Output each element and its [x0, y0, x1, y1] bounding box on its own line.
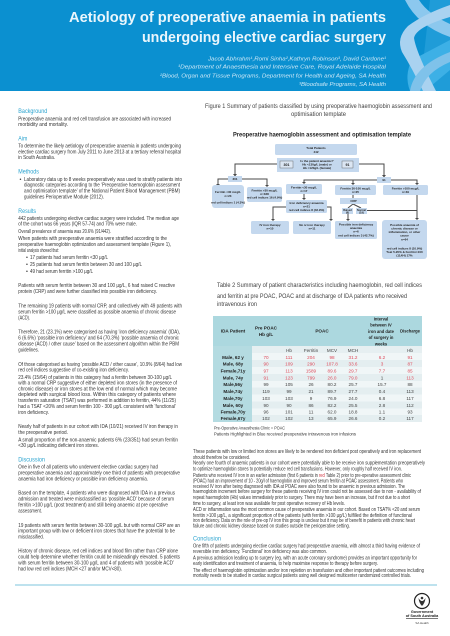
conclusion section — [193, 536, 424, 579]
table rows in dark text: Female,67y — [221, 416, 246, 421]
table header: POAC — [315, 328, 329, 334]
results section: Results — [18, 208, 36, 215]
box: possible iron deficiency — [335, 221, 377, 239]
results section: Therefore, 21 (23.1%) were categorised as having ‘iron deficiency anaemia’ (IDA), — [18, 330, 180, 336]
results section: 23.4% (15/64) of patients in this category had a ferritin between 30-100 µg/L — [18, 375, 172, 381]
table 2 caption: and ferritin at pre POAC, POAC and at discharge of IDA patients who received — [217, 293, 407, 300]
header banner — [0, 0, 450, 91]
aim section: elective cardiac surgery from July 2011 to June 2013 at a tertiary referral hospital — [18, 150, 181, 156]
table rows in dark text: 82.2 — [328, 403, 337, 408]
anaemia question box: Hb <120g/L (female) — [303, 166, 331, 170]
anaemia question box: 91 — [346, 163, 350, 167]
box: ferritin 30-100: Ferritin 30-100 mcg/L — [340, 186, 371, 190]
table 2: IDA patients — [213, 316, 422, 422]
box: normal CRP: Normal — [357, 208, 366, 212]
table rows in dark text: 2.8 — [379, 403, 386, 408]
box: ferritin under 30, non-anaemic: Ferritin <30 mcg/L — [215, 190, 241, 194]
table rows in dark text: 0.2 — [379, 416, 386, 421]
title: undergoing elective cardiac surgery — [142, 29, 387, 46]
results section: A small proportion of the non-anaemic patients 6% (23/351) had serum ferritin — [18, 438, 178, 444]
discussion section: Based on the template, 4 patients who were diagnosed with IDA in a previous — [18, 490, 175, 496]
logo: Government of South Australia: Government — [411, 610, 434, 614]
box: IV iron therapy: n=10 — [267, 226, 274, 230]
box: possible anaemia of chronic disease: n=64 — [401, 238, 408, 242]
discussion section: assessment. — [18, 508, 42, 514]
table rows highlighted in red: 91 — [263, 376, 269, 380]
results section: 17 patients had serum ferritin <30 µg/L — [30, 255, 108, 261]
table 2 caption — [217, 282, 422, 308]
table rows in dark text: 90 — [286, 403, 292, 408]
non-anaemic node: 301: 301 — [232, 177, 238, 181]
table rows highlighted in red: 26.0 — [328, 376, 337, 380]
table rows in dark text — [221, 382, 414, 421]
table header: IDA Patient — [221, 328, 246, 334]
box: possible anaemia of chronic disease: Possible anaemia of — [390, 223, 419, 227]
box: possible anaemia of chronic disease — [382, 220, 427, 259]
table rows in dark text: 21 — [308, 389, 314, 394]
table rows in dark text: 26.6 — [349, 416, 358, 421]
table rows highlighted in red: Male, 62 y — [222, 355, 244, 360]
right text column: discussion continued: time to surgery, at least iron was available for post operative recovery of Hb levels. — [193, 501, 345, 507]
background section: morbidity and mortality. — [18, 122, 68, 128]
box: iron deficiency anaemia: red cell indices 8 (42.9%) — [289, 208, 324, 212]
aim section: Aim — [18, 136, 27, 143]
table rows highlighted in red: Male, 74y — [223, 376, 244, 380]
background section: Background — [18, 108, 48, 115]
table rows in dark text: 86 — [308, 403, 314, 408]
background section — [18, 108, 171, 128]
box: raised CRP: Raised — [343, 208, 352, 212]
box: raised CRP: (6) — [346, 210, 349, 214]
table rows in dark text: Male,70y — [223, 396, 243, 401]
box: no iron therapy: No iv iron therapy — [299, 223, 325, 227]
results section: 6 (6.6%) ‘possible iron deficiency’ and 64 (70.3%) ‘possible anaemia of chronic — [18, 336, 179, 342]
box: ferritin over 30, non-anaemic — [247, 187, 282, 202]
table header: weeks — [374, 341, 388, 346]
box: possible iron deficiency: anaemia — [350, 226, 362, 230]
box: possible anaemia of chronic disease: cause — [400, 234, 409, 238]
box: iron deficiency anaemia: Iron deficiency anaemia — [289, 201, 324, 205]
methods section: Methods — [18, 169, 39, 176]
box: iron deficiency anaemia — [286, 200, 327, 213]
figure 1 caption: optimisation template — [291, 111, 347, 118]
results section: initial analysis showed that: — [18, 248, 59, 254]
table header: Pre POAC — [255, 326, 278, 330]
right text column: discussion continued: failure and chronic kidney disease based on studies outside the perioperative setting. — [193, 524, 350, 530]
table rows highlighted in red: Male, 68y — [223, 362, 244, 366]
results section: 442 patients undergoing elective cardiac surgery were included. The median age — [18, 216, 179, 222]
box: ferritin 30-100: n=25 — [352, 190, 359, 194]
table rows highlighted in red: 70 — [263, 355, 269, 360]
table rows in dark text: 15.7 — [378, 382, 387, 387]
conclusion section: reversible iron deficiency. ‘Functional’ iron deficiency was also common. — [193, 549, 327, 555]
box: ferritin over 100: Ferritin >100 mcg/L — [392, 186, 419, 190]
total patients box — [275, 144, 357, 155]
table rows in dark text: 24.0 — [349, 396, 358, 401]
table rows in dark text: 76.9 — [328, 396, 337, 401]
discussion section: preoperative anaemia and approximately one third of patients with preoperative — [18, 470, 180, 476]
results section: • — [26, 255, 28, 261]
authors and affiliations: ³Bloodsafe Programs, SA Health — [299, 82, 386, 88]
table rows highlighted in red: 113 — [285, 368, 293, 374]
box: ferritin under 30, anaemic — [286, 184, 322, 194]
table rows in dark text: 119 — [262, 389, 270, 394]
anaemic node: 91 — [377, 177, 391, 183]
discussion section: admission and treated were misclassified as ‘possible ACD’ because of serum — [18, 496, 174, 502]
background section: Preoperative anaemia and red cell transfusion are associated with increased — [18, 116, 171, 122]
box: ferritin under 30, non-anaemic: n=23 — [225, 194, 232, 198]
table rows highlighted in red — [221, 355, 414, 380]
table rows in dark text: 93 — [407, 410, 413, 414]
table rows highlighted in red: 113 — [406, 376, 414, 380]
total patients box: 442 — [313, 150, 319, 154]
box: no iron therapy: n=11 — [309, 226, 316, 230]
aim section: in South Australia. — [18, 155, 55, 161]
table rows in dark text: 9 — [310, 396, 313, 401]
results section: serum ferritin >100 µg/L were classified as possible anaemia of chronic disease — [18, 310, 176, 316]
aim section: To determine the likely aetiology of preoperative anaemia in patients undergoing — [18, 144, 181, 150]
box: ferritin under 30, anaemic: n=17 — [301, 189, 308, 193]
table header: Ferritin — [304, 348, 319, 353]
results section: chronic disease) or iron stores at the low end of normal which may become — [18, 386, 177, 392]
arrowheads — [216, 174, 419, 221]
methods section: Laboratory data up to 8 weeks preoperatively was used to stratify patients into — [24, 177, 182, 183]
table rows highlighted in red: 123 — [285, 376, 293, 380]
table rows in dark text: 65.9 — [328, 416, 337, 421]
box: raised CRP — [342, 208, 353, 214]
table header: Discharge — [400, 328, 421, 334]
table rows in dark text: 103 — [285, 396, 293, 401]
figure 1 caption — [205, 103, 432, 118]
results section: When patients with preoperative anaemia were stratified according to the — [18, 236, 167, 242]
icon: state crest — [414, 594, 430, 608]
box: possible anaemia of chronic disease: Tsat 5-20% & Ferritin>100 — [386, 250, 423, 254]
table rows in dark text: 1.1 — [379, 410, 386, 414]
anaemia question box: 301 — [284, 163, 290, 167]
results section: 25 patients had serum ferritin between 30 and 100 µg/L — [30, 262, 142, 268]
table rows highlighted in red: 98 — [329, 355, 335, 360]
flowchart title: Preoperative haemoglobin assessment and optimisation template — [233, 131, 412, 138]
table rows in dark text: 88 — [407, 382, 413, 387]
right text column: discussion continued: Patients who received IV iron in an earlier admission (first 6 patients in red Table 2) prior to pre-operative assessment clinic — [193, 473, 411, 479]
table rows in dark text: 113 — [406, 389, 414, 394]
box: IV iron therapy: IV iron therapy — [259, 223, 281, 227]
table rows in dark text: 112 — [406, 403, 414, 408]
table rows highlighted in red: 33.6 — [349, 362, 358, 366]
box: possible anaemia of chronic disease: chronic disease or — [391, 226, 419, 230]
table notes: Pre-Operative Anaesthesia Clinic = POAC — [214, 426, 286, 431]
table header: iron and date — [368, 329, 395, 334]
results section: had a TSAT <20% and serum ferritin 100 - 300 µg/L consistent with ‘functional’ — [18, 404, 176, 410]
anaemia question box — [277, 158, 359, 172]
table rows in dark text: 101 — [285, 410, 293, 414]
box: possible anaemia of chronic disease: red cell indices 8 (10.9%) — [387, 246, 422, 250]
table rows in dark text: 99 — [263, 382, 269, 387]
results section: • — [26, 269, 28, 275]
table rows highlighted in red: 111 — [286, 355, 293, 360]
table rows in dark text: 89.7 — [328, 389, 337, 394]
non-anaemic node: 301 — [228, 176, 242, 182]
title: Aetiology of preoperative anaemia in patients — [69, 9, 386, 26]
results section: Overall prevalence of anaemia was 20.6% (91/442). — [18, 229, 111, 235]
discussion section: Discussion — [18, 457, 45, 464]
table rows in dark text: Male, 60y — [223, 403, 244, 408]
discussion section: with serum ferritin between 30-100 µg/L and 4 of patients with ‘possible ACD’ — [17, 560, 174, 566]
box: no iron therapy — [293, 221, 331, 234]
authors and affiliations: ¹Department of Anaesthesia and Intensive Care, Royal Adelaide Hospital — [178, 65, 387, 71]
table rows in dark text: Female,70y — [221, 410, 246, 414]
discussion section — [17, 457, 180, 572]
table rows in dark text: 27.7 — [349, 389, 358, 394]
table header: of surgery in — [369, 335, 394, 340]
results section: Of those categorised as having ‘possible ACD / other cause’, 10.9% (8/64) had low — [18, 362, 182, 368]
results section: Nearly half of patients in our cohort with IDA (10/21) received IV iron therapy in — [18, 424, 178, 430]
anaemia question box: Hb <130g/L (male) or — [302, 162, 333, 166]
table header: between IV — [370, 323, 392, 328]
results section: of the cohort was 66 years (IQR 57-74) and 70% were male. — [18, 222, 137, 228]
box: ferritin over 30, non-anaemic: red cell indices 16 (4.9%) — [247, 196, 282, 200]
results section: iron deficiency. — [18, 410, 49, 416]
table rows highlighted in red: 97 — [263, 368, 269, 374]
table rows highlighted in red: 107.8 — [326, 362, 338, 366]
box: possible iron deficiency: Possible iron deficiency — [339, 222, 373, 226]
discussion section: had low red cell indices (MCH <27 and/or MCV<80). — [18, 566, 122, 572]
results section: (ACD). — [18, 316, 30, 322]
table rows highlighted in red: 79.0 — [349, 376, 358, 380]
table header: Hb g/L — [259, 332, 273, 337]
results section — [17, 208, 182, 449]
box: CRP: CRP — [350, 199, 357, 203]
methods section: • — [20, 177, 22, 183]
results section: red cell indices suggestive of co-existing iron deficiency. — [18, 368, 129, 374]
table rows in dark text: 102 — [285, 416, 293, 421]
table header: Hb — [286, 348, 292, 353]
table rows in dark text: Male,74y — [223, 389, 243, 394]
table rows in dark text: 25.5 — [349, 403, 358, 408]
flowchart: preoperative haemoglobin assessment — [211, 131, 428, 259]
table rows in dark text: 102 — [262, 416, 270, 421]
table rows highlighted in red: 91 — [407, 355, 413, 360]
results section: <30 µg/L indicating deficient iron stores. — [18, 443, 99, 449]
methods section — [18, 169, 182, 200]
title — [69, 9, 387, 46]
discussion section: anaemia had iron deficiency or possible iron deficiency anaemia. — [18, 476, 148, 482]
methods section: diagnostic categories according to the ‘Preoperative haemoglobin assessment — [24, 182, 180, 188]
table rows in dark text: Male,56y — [223, 382, 243, 387]
table rows in dark text: 105 — [285, 382, 293, 387]
table 2 caption: Table 2 Summary of patient characteristics including haemoglobin, red cell indices — [217, 282, 422, 289]
results section: The remaining 19 patients with normal CRP, and collectively with 49 patients with — [18, 304, 182, 310]
discussion section: ferritin >100 µg/L (post treatment) and still being anaemic at pre operative — [18, 502, 168, 508]
table notes — [214, 426, 357, 437]
table rows in dark text: 117 — [406, 416, 414, 421]
table header — [221, 316, 421, 353]
table rows highlighted in red: 90 — [263, 362, 269, 366]
table rows in dark text: 25.7 — [349, 382, 358, 387]
conclusion section: Conclusion — [193, 536, 221, 543]
table rows in dark text: 6.8 — [379, 396, 386, 401]
table rows in dark text: 0.4 — [379, 389, 386, 394]
methods section: and optimisation template’ of the National Patient Blood Management (PBM) — [24, 188, 180, 194]
discussion section: could help determine whether ferritin could be misleadingly elevated. 5 patients — [18, 554, 180, 560]
table rows in dark text: 18.8 — [349, 410, 358, 414]
results section: protein (CRP) and were further classified into possible iron deficiency. — [18, 289, 157, 295]
box: possible anaemia of chronic disease: inflammation, or other — [389, 230, 421, 234]
aim section — [18, 136, 181, 161]
logo: Government of South Australia — [406, 594, 439, 625]
table rows in dark text: 26 — [308, 382, 314, 387]
results section: with a normal CRP suggestive of either depleted iron stores (in the presence of — [17, 380, 177, 386]
discussion section: important group with low or deficient iron stores that have the potential to be — [18, 528, 175, 534]
box: ferritin under 30, non-anaemic — [211, 185, 245, 208]
table rows in dark text: 90 — [263, 403, 269, 408]
box: normal CRP — [356, 208, 367, 214]
box: normal CRP: (19) — [359, 210, 364, 214]
box: ferritin 30-100 — [335, 185, 376, 195]
table rows highlighted in red: 31.2 — [349, 355, 358, 360]
box: ferritin over 30, non-anaemic: n=328 — [260, 192, 269, 196]
discussion section: History of chronic disease, red cell indices and blood film rather than CRP alone — [18, 548, 178, 554]
table header: Interval — [374, 316, 388, 322]
logo: Government of South Australia: SA Health — [415, 621, 429, 625]
results section: transferrin saturation (TSAT) was performed in addition to ferritin, 44% (11/25) — [18, 398, 176, 404]
table header: MCV — [327, 348, 338, 353]
right text column: discussion continued: should therefore be considered. — [193, 455, 250, 461]
box: ferritin under 30, anaemic: Ferritin <30 mcg/L — [291, 186, 317, 190]
methods section: guidelines Perioperative Module (2012). — [24, 194, 104, 200]
table rows highlighted in red: Female,71y — [221, 368, 246, 374]
box: iron deficiency anaemia: n=21 — [303, 204, 310, 208]
table rows highlighted in red: 85 — [407, 368, 413, 374]
table notes: Patients Highlighted in Blue received preoperative intravenous iron infusions — [214, 432, 357, 437]
table rows highlighted in red: 290 — [307, 362, 315, 366]
discussion section: 19 patients with serum ferritin between 30-100 µg/L but with normal CRP are an — [18, 523, 180, 529]
table rows in dark text: 80.2 — [328, 382, 337, 387]
table rows highlighted in red: 29.7 — [349, 368, 358, 374]
table rows in dark text: 11 — [309, 410, 314, 414]
table 2 caption: intravenous iron — [217, 301, 258, 308]
left text column — [17, 108, 182, 572]
table rows highlighted in red: 204 — [307, 355, 315, 360]
results section: preoperative haemoglobin optimization and assessment template (Figure 1), — [18, 242, 171, 248]
discussion section: One in five of all patients who underwent elective cardiac surgery had — [18, 464, 158, 470]
anaemic node: 91: 91 — [382, 178, 386, 182]
table rows highlighted in red: 1589 — [306, 368, 317, 374]
table rows in dark text: 62.0 — [328, 410, 337, 414]
results section: 49 had serum ferritin >100 µg/L — [30, 269, 93, 275]
results section: • — [26, 262, 28, 268]
right text column: discussion continued — [193, 449, 425, 530]
results section: depleted with surgical blood loss. Within this category of patients where — [18, 392, 176, 398]
table header: MCH — [348, 348, 358, 353]
box: possible iron deficiency: n=6 — [353, 230, 359, 234]
total patients box: Total Patients — [306, 146, 326, 150]
table rows highlighted in red: 89.6 — [328, 368, 337, 374]
box: ferritin over 30, non-anaemic: Ferritin >30 mcg/L — [252, 188, 278, 192]
table rows highlighted in red: 87 — [407, 362, 413, 366]
box: possible iron deficiency: red cell indices 3 (42.7%) — [338, 234, 374, 238]
logo: Government of South Australia: of South Australia — [406, 614, 439, 618]
results section: guidelines. — [18, 348, 39, 354]
results section: disease (ACD) / other cause’ based on the assessment algorithm within the PBM — [18, 342, 179, 348]
table rows in dark text: 103 — [262, 396, 270, 401]
box: CRP — [340, 198, 367, 204]
box: ferritin over 100: n=49 — [402, 190, 409, 194]
discussion section: misclassified. — [18, 534, 44, 540]
table rows highlighted in red: 799 — [307, 376, 315, 380]
authors and affiliations: Jacob Abhrahm¹,Romi Sinha²,Kathryn Robinson³, David Cardone¹ — [207, 57, 386, 63]
table rows in dark text: 13 — [308, 416, 314, 421]
table rows highlighted in red: 7.7 — [379, 368, 386, 374]
results section: Patients with serum ferritin between 30 and 100 µg/L, 6 had raised C reactive — [18, 283, 175, 289]
authors and affiliations — [160, 57, 387, 88]
results section: the preoperative period. — [18, 430, 68, 436]
table rows highlighted in red: 6.2 — [379, 355, 386, 360]
table header: Hb — [407, 348, 413, 353]
authors and affiliations: ²Blood, Organ and Tissue Programs, Department for Health and Ageing, SA Health — [160, 73, 386, 79]
box: possible anaemia of chronic disease: (11/64) 17% — [396, 254, 413, 258]
box: ferritin under 30, non-anaemic: red cell indices 1 (4.3%) — [211, 200, 245, 204]
decorative ribbon graphic — [400, 0, 450, 91]
box: IV iron therapy — [251, 221, 289, 234]
box: ferritin over 100 — [383, 185, 428, 195]
table rows highlighted in red: 109 — [285, 362, 293, 366]
anaemia question box: Is the patient anaemic? — [300, 159, 334, 163]
table rows in dark text: 117 — [406, 396, 414, 401]
conclusion section: early identification and treatment of anaemia, to help maximise response to therapy before surgery. — [193, 561, 378, 567]
table rows highlighted in red: 1 — [381, 376, 384, 380]
table rows highlighted in red: 3 — [381, 362, 384, 366]
table rows in dark text: 96 — [263, 410, 269, 414]
table rows in dark text: 99 — [286, 389, 292, 394]
